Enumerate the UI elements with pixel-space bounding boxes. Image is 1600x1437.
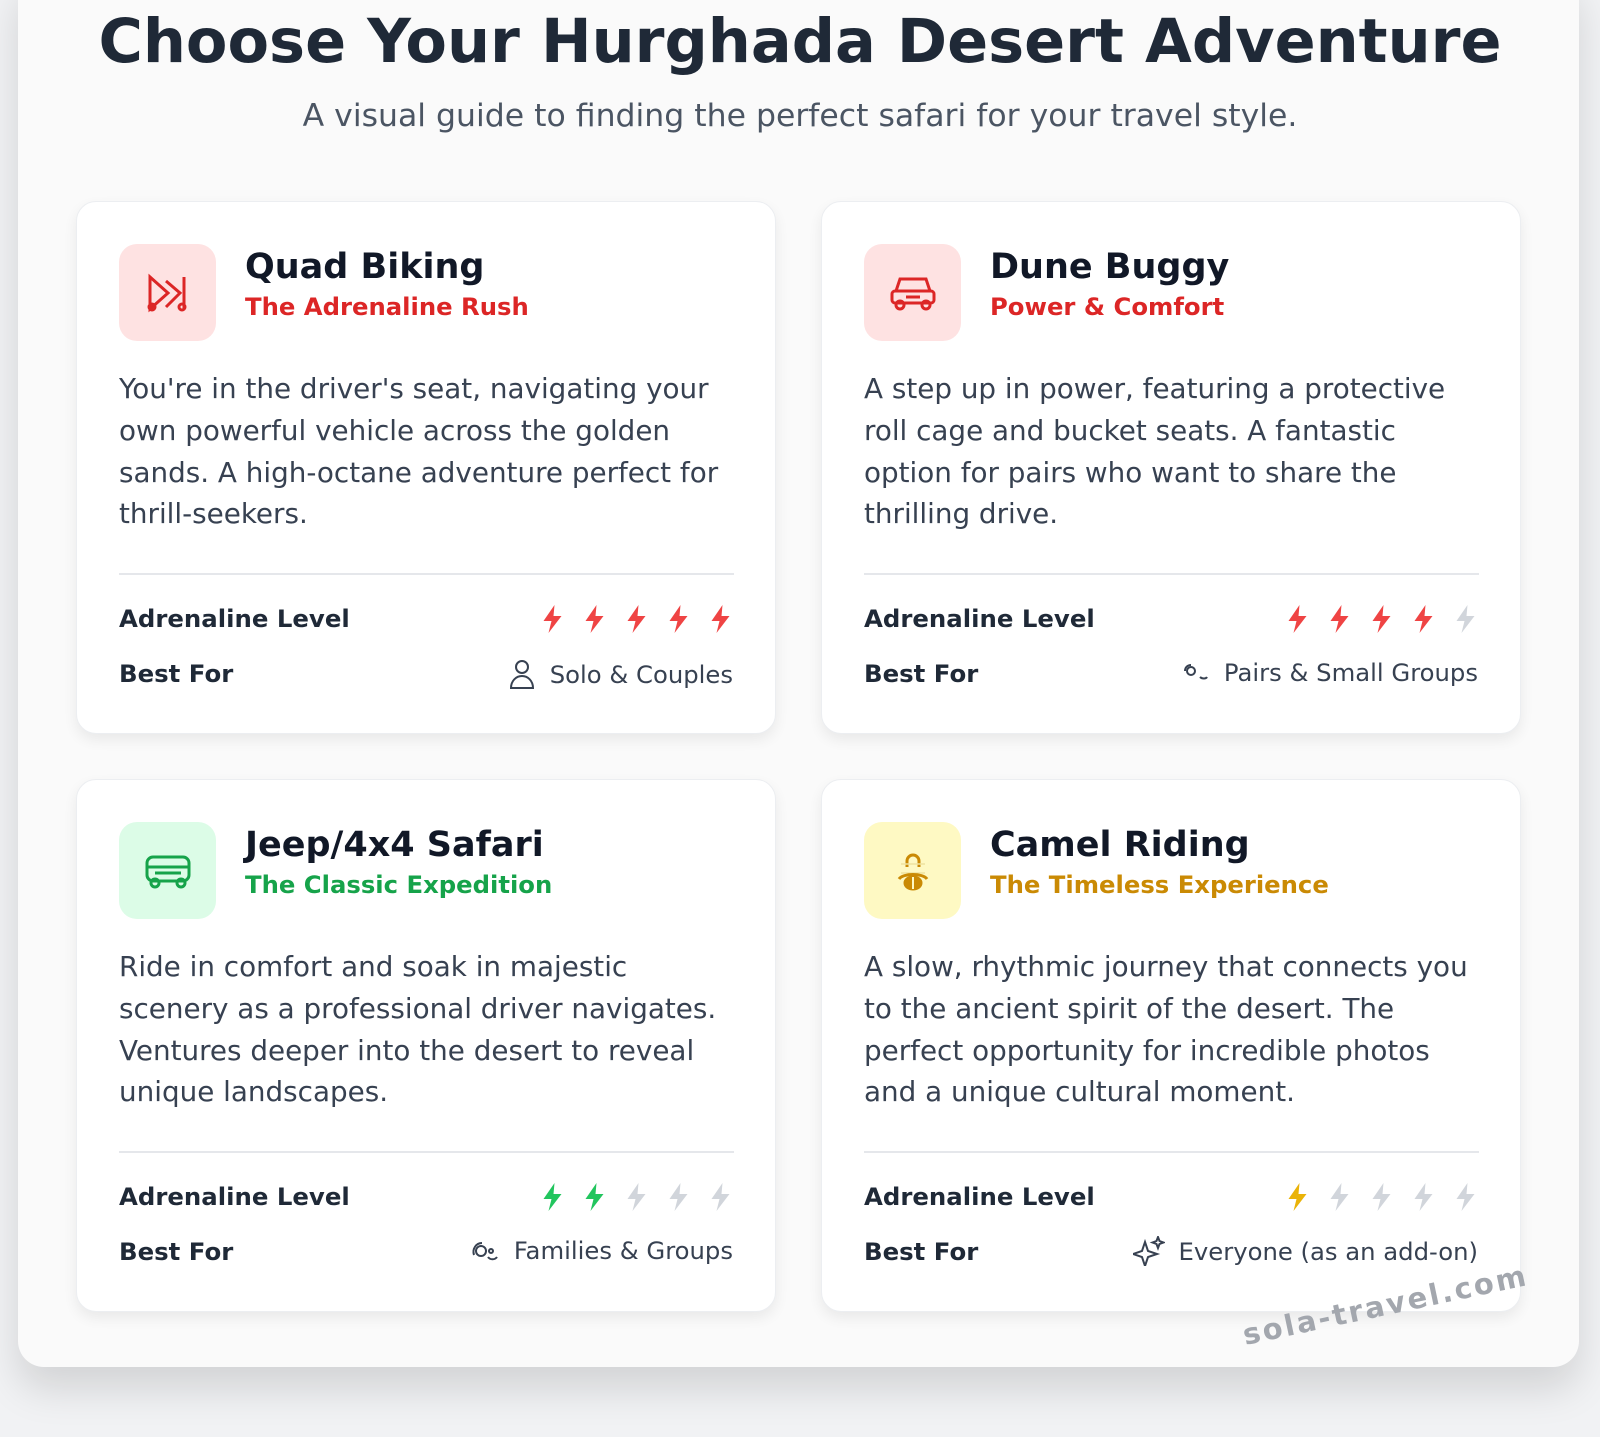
best for label: Best For [864,659,978,688]
subtitle: A visual guide to finding the perfect safari for your travel style. [303,98,1297,134]
panel: camel riding [821,779,1521,1312]
icon: quad [119,244,216,341]
description: A step up in power, featuring a protective roll cage and bucket seats. A fantastic option for pairs who want to share the thrilling drive. [864,372,1445,530]
adrenaline label: Adrenaline Level [119,1182,350,1211]
best for label: Best For [864,1237,978,1266]
heading: Camel Riding [990,825,1250,865]
best for value: Everyone (as an add-on) [1179,1236,1478,1266]
adrenaline label: Adrenaline Level [119,604,350,633]
tagline: The Classic Expedition [245,870,552,899]
title: Choose Your Hurghada Desert Adventure [98,7,1502,77]
watermark: sola-travel.com [1240,1258,1531,1352]
panel: dune buggy [821,201,1521,734]
icon: buggy [864,244,961,341]
rating bolts [544,1183,730,1211]
heading: Dune Buggy [990,247,1229,287]
adrenaline label: Adrenaline Level [864,604,1095,633]
heading: Quad Biking [245,247,484,287]
best for value: Families & Groups [514,1236,733,1265]
description: You're in the driver's seat, navigating your own powerful vehicle across the golden sands. A high-octane adventure perfect for thrill-seekers. [119,372,718,530]
description: A slow, rhythmic journey that connects you to the ancient spirit of the desert. The perfect opportunity for incredible photos and a unique cultural moment. [864,950,1468,1108]
panel: quad biking [76,201,776,734]
heading: Jeep/4x4 Safari [245,825,544,865]
icon: camel [864,822,961,919]
best for label: Best For [119,1237,233,1266]
icon: jeep [119,822,216,919]
rating bolts [1288,605,1474,633]
rating bolts [544,605,730,633]
tagline: The Timeless Experience [990,870,1329,899]
description: Ride in comfort and soak in majestic scenery as a professional driver navigates. Ventures deeper into the desert to reveal unique landscapes. [119,950,716,1108]
best for value: Solo & Couples [550,660,733,688]
rating bolts [1288,1183,1474,1211]
adrenaline label: Adrenaline Level [864,1182,1095,1211]
best for label: Best For [119,659,233,688]
panel: jeep safari [76,779,776,1312]
best for value: Pairs & Small Groups [1224,658,1478,687]
tagline: The Adrenaline Rush [245,292,529,321]
tagline: Power & Comfort [990,292,1224,321]
